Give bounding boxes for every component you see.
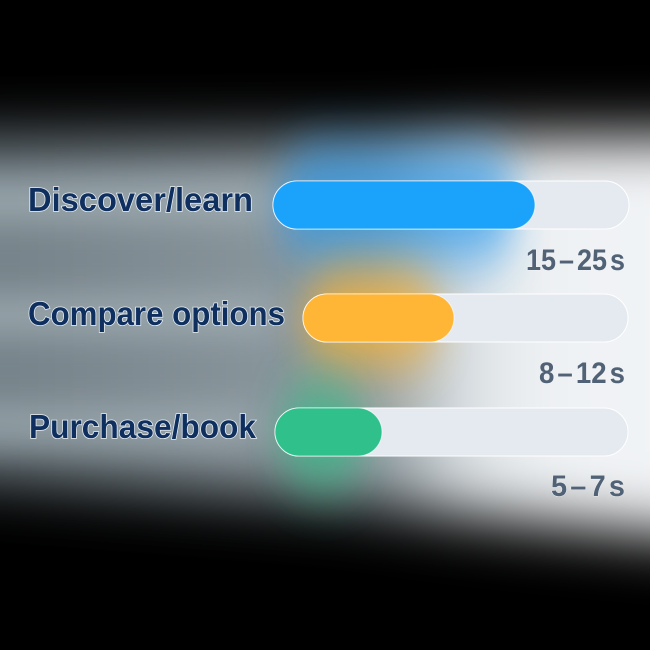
- value: 15–25 s: 15 – 25 s: [526, 244, 625, 277]
- bar: Discover/learn: [273, 181, 629, 229]
- bar: Purchase/book: [275, 408, 628, 456]
- value: 5–7 s: 5 – 7 s: [551, 470, 625, 503]
- glow: green: [283, 385, 361, 485]
- glow: orange: [305, 272, 437, 364]
- glow: blue: [282, 150, 514, 260]
- value: 8–12 s: 8 – 12 s: [539, 357, 625, 390]
- label: Discover/learn: Discover/learn: [28, 181, 253, 218]
- label: Purchase/book: Purchase/book: [29, 408, 257, 445]
- bar: Compare options: [303, 294, 628, 342]
- label: Compare options: Compare options: [28, 295, 285, 332]
